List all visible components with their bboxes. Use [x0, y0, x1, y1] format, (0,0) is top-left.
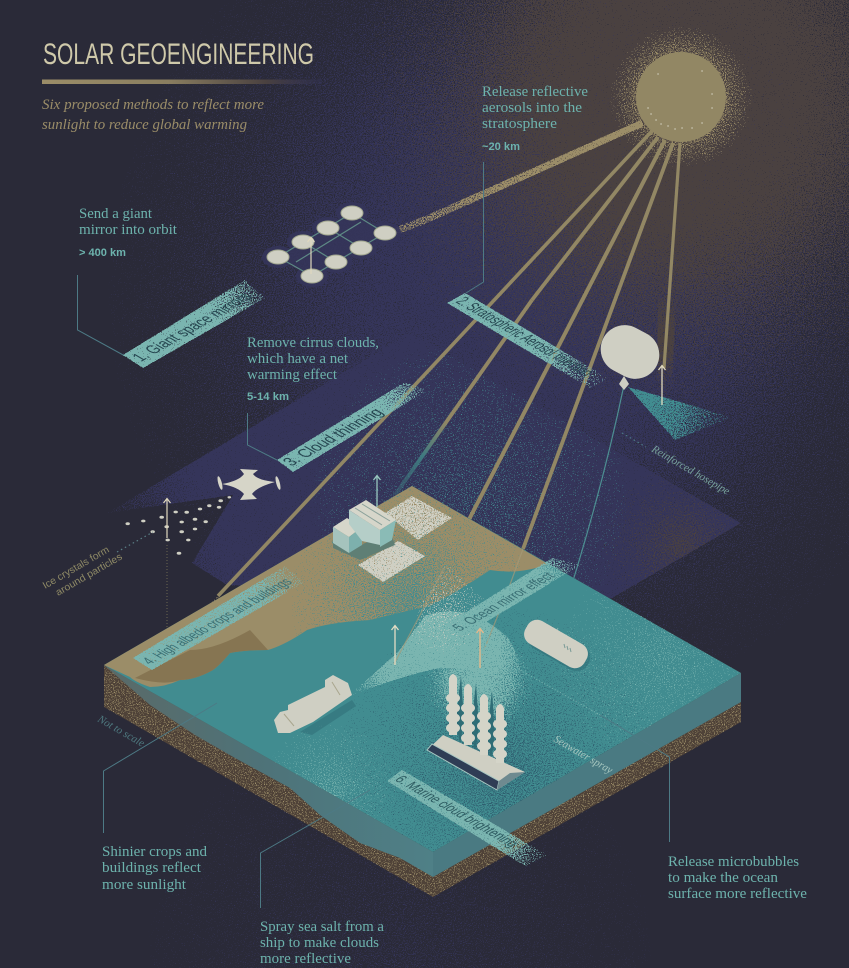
text: cirrus method	[247, 335, 379, 403]
ray to crops	[218, 131, 652, 596]
text: aerosol method: Release reflective	[482, 84, 588, 100]
text: cirrus method: Remove cirrus clouds,	[247, 335, 379, 351]
text: crops method: more sunlight	[102, 877, 186, 893]
text: microbubbles method	[668, 854, 807, 902]
label 3	[277, 382, 428, 472]
text: cirrus method: which have a net	[247, 351, 348, 367]
arrow: microbubble hose guide	[546, 628, 558, 650]
text: cirrus method: 5-14 km	[247, 391, 289, 403]
sea surface	[104, 486, 741, 852]
ray to space mirrors	[386, 120, 644, 238]
label 5: 5. Ocean mirror effect	[449, 570, 559, 634]
text: mirror method: Send a giant	[79, 206, 152, 222]
subtitle: Six proposed methods to reflect more	[42, 97, 265, 113]
caption: ice crystals: around particles	[54, 552, 124, 599]
text: sea salt method: ship to make clouds	[260, 935, 379, 951]
land shaded coast	[135, 630, 268, 683]
platform base	[427, 735, 525, 790]
text: aerosol method: stratosphere	[482, 116, 557, 132]
dotted leader: hosepipe	[622, 433, 646, 447]
title rule	[42, 80, 322, 84]
microbubble ship	[520, 616, 595, 676]
text: microbubbles method: surface more reflective	[668, 886, 807, 902]
arrow: reflected light	[308, 238, 314, 274]
dark shaft around aerosol ray	[657, 260, 677, 395]
ice crystal particles	[126, 496, 231, 555]
caption: ice crystals	[41, 545, 124, 599]
subtitle: sunlight to reduce global warming	[42, 117, 247, 133]
sun	[609, 25, 753, 169]
building large	[349, 500, 396, 547]
sunlight beam on land	[410, 564, 485, 660]
text: crops method	[102, 844, 208, 893]
ray to cloud thinning	[532, 137, 658, 300]
label 4	[133, 566, 305, 670]
text: microbubbles method: Release microbubbles	[668, 854, 799, 870]
label 2: 2. Stratospheric Aerosol Injection	[452, 294, 598, 379]
arrow: ice crystals reflect	[164, 498, 170, 538]
dotted guide from crops	[166, 545, 168, 640]
block base	[104, 486, 741, 897]
title: SOLAR GEOENGINEERING	[43, 38, 314, 71]
ocean and land block	[104, 486, 741, 897]
text: aerosol method: aerosols into the	[482, 100, 582, 116]
arrow: buildings reflect	[374, 476, 380, 507]
mirror discs	[267, 206, 396, 283]
caption: seawater spray: Seawater spray	[552, 733, 615, 777]
text: microbubbles method: to make the ocean	[668, 870, 779, 886]
label 3: 3. Cloud thinning	[279, 405, 388, 469]
arrow: spray towers reflect	[476, 628, 484, 668]
text: mirror method: > 400 km	[79, 247, 126, 259]
arrow: aerosols reflect	[658, 366, 666, 405]
text: mirror method	[79, 206, 177, 259]
ray to sea	[523, 143, 673, 549]
space mirrors	[262, 202, 401, 287]
balloon payload	[619, 376, 629, 390]
balloon envelope	[592, 317, 668, 387]
balloon	[558, 317, 732, 628]
drone	[216, 469, 282, 500]
dotted leader: ice crystals	[117, 532, 153, 552]
text: aerosol method: ~20 km	[482, 141, 520, 153]
land teal speckle	[104, 486, 548, 687]
label 2	[447, 293, 608, 388]
caption: ice crystals: Ice crystals form	[41, 545, 111, 592]
text: crops method: Shinier crops and	[102, 844, 208, 860]
text: sea salt method: more reflective	[260, 951, 351, 967]
sunlight line on water	[394, 566, 445, 664]
spray ship	[274, 675, 356, 735]
text: sea salt method: Spray sea salt from a	[260, 919, 385, 935]
label 4: 4. High albedo crops and buildings	[139, 576, 296, 667]
building small	[333, 518, 362, 553]
caption: not to scale: Not to scale	[95, 713, 147, 750]
text: aerosol method	[482, 84, 588, 153]
spray towers	[446, 674, 507, 763]
land	[104, 486, 548, 687]
ray to ocean mirror	[445, 140, 665, 566]
building shadow	[333, 530, 395, 560]
sea spray plume	[353, 611, 521, 695]
flat reflective roof 1	[385, 496, 452, 540]
sun rays	[218, 120, 680, 596]
bedrock speckle	[104, 665, 741, 897]
aerosol cone	[628, 387, 732, 440]
ray to stratosphere	[664, 143, 680, 368]
right water wall	[433, 673, 741, 877]
caption: hosepipe: Reinforced hosepipe	[649, 443, 732, 498]
mirror glow	[262, 202, 401, 287]
text: sea salt method	[260, 919, 385, 967]
flat reflective roof 2	[358, 541, 425, 582]
sea light speckle	[104, 486, 741, 852]
faint ray on crops	[186, 596, 222, 630]
arrow: spray ship reflects	[392, 626, 398, 665]
text: mirror method: mirror into orbit	[79, 222, 177, 238]
text: crops method: buildings reflect	[102, 860, 201, 876]
sea dark patch	[104, 486, 741, 852]
mirror frame	[278, 213, 385, 276]
left water wall	[104, 665, 433, 877]
hosepipe	[558, 385, 624, 628]
seawater spray platform	[423, 625, 533, 790]
tower vapour plume	[423, 625, 533, 735]
label 6: 6. Marine cloud brightening	[391, 773, 522, 850]
text: cirrus method: warming effect	[247, 367, 337, 383]
cloud layer plane	[107, 333, 741, 598]
leader lines for upper labels	[78, 162, 484, 460]
leader lines for lower labels	[104, 670, 670, 908]
label 1: 1. Giant space mirrors	[128, 290, 256, 364]
dark spires	[456, 675, 495, 760]
